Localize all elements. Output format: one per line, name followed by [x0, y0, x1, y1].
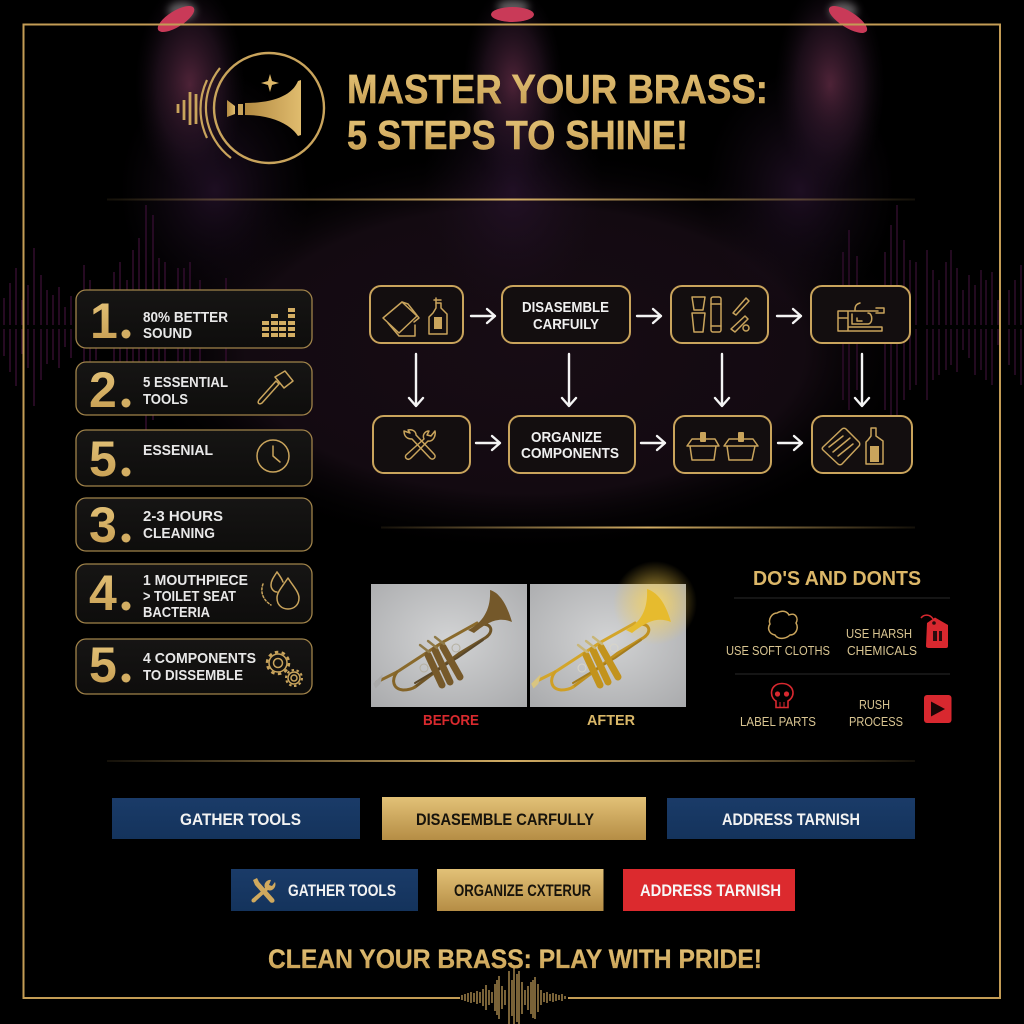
stat card 1: 80% BETTER [143, 309, 228, 326]
stat card 3: 5 [89, 431, 117, 487]
stat card 1: 1 [90, 293, 118, 349]
stat card 6: 5 [89, 637, 117, 693]
panel: do's and donts: PROCESS [849, 714, 903, 729]
stat card 2 [76, 362, 312, 418]
flow box: storage trays [674, 416, 771, 473]
flow box: cloth and bottle [370, 286, 463, 343]
logo: horn in circle with sound waves [178, 53, 324, 163]
stat card 2: 5 ESSENTIAL [143, 374, 228, 391]
flow box: polish cloth and spray [812, 416, 912, 473]
divider top [107, 198, 915, 200]
flow arrows vertical [409, 354, 869, 406]
title [347, 66, 768, 158]
before photo [371, 584, 527, 707]
divider lower [107, 760, 915, 762]
panel: do's and donts: DO'S AND DONTS [753, 568, 921, 590]
flow box: disasemble carfuily: DISASEMBLE [522, 299, 609, 316]
stat card 4: 3 [89, 497, 117, 553]
flow box: disasemble carfuily: CARFUILY [533, 316, 599, 333]
stat card 6 [76, 637, 312, 694]
flow arrows horizontal [471, 309, 802, 450]
spotlights [154, 0, 871, 38]
title: MASTER YOUR BRASS: [347, 66, 768, 112]
stat card 1 [76, 290, 312, 349]
button row 2: GATHER TOOLS [288, 881, 396, 900]
after label: AFTER [587, 712, 635, 729]
stat card 5: 4 [89, 565, 117, 621]
panel: do's and donts: USE SOFT CLOTHS [726, 643, 830, 658]
stat card 4: CLEANING [143, 525, 215, 542]
stat card 4: 2-3 HOURS [143, 508, 223, 525]
button row 2: ORGANIZE CXTERUR [454, 881, 591, 900]
flow box: disasemble carfuily [502, 286, 630, 343]
stat card 3 [76, 430, 312, 487]
flow box: brass parts [671, 286, 768, 343]
flow box: tools [373, 416, 470, 473]
panel: do's and donts: RUSH [859, 697, 890, 712]
stat card 5 [76, 564, 312, 623]
stat card 5: 1 MOUTHPIECE [143, 572, 248, 589]
button row 1: DISASEMBLE CARFULLY [416, 810, 595, 829]
closing tagline: CLEAN YOUR BRASS: PLAY WITH PRIDE! [268, 944, 762, 974]
button row 1: GATHER TOOLS [180, 810, 301, 829]
panel: do's and donts: USE HARSH [846, 626, 912, 641]
button row 1: ADDRESS TARNISH [722, 810, 860, 829]
flow box: organize components: COMPONENTS [521, 445, 619, 462]
flow box: valve assembly [811, 286, 910, 343]
stat card 2: TOOLS [143, 391, 188, 408]
button row 1 [112, 797, 915, 840]
button row 2 [231, 869, 795, 911]
stat card 6: 4 COMPONENTS [143, 650, 256, 667]
stat card 3: ESSENIAL [143, 442, 213, 459]
stat card 2: 2 [89, 362, 117, 418]
background waveform right [843, 205, 1021, 440]
stat card 5: BACTERIA [143, 604, 210, 621]
panel: do's and donts: LABEL PARTS [740, 714, 816, 729]
background waveform left [4, 205, 226, 430]
title: 5 STEPS TO SHINE! [347, 112, 688, 158]
before label: BEFORE [423, 712, 479, 729]
footer waveform [462, 968, 565, 1024]
button row 2: ADDRESS TARNISH [640, 881, 781, 900]
flow box: organize components [509, 416, 635, 473]
after photo [530, 561, 697, 707]
stat card 4 [76, 497, 312, 553]
panel: do's and donts [726, 568, 952, 729]
stat card 6: TO DISSEMBLE [143, 667, 243, 684]
stat card 1: SOUND [143, 325, 192, 342]
stat card 5: > TOILET SEAT [143, 588, 236, 605]
divider middle [381, 526, 915, 528]
flow box: organize components: ORGANIZE [531, 429, 602, 446]
panel: do's and donts: CHEMICALS [847, 643, 917, 658]
